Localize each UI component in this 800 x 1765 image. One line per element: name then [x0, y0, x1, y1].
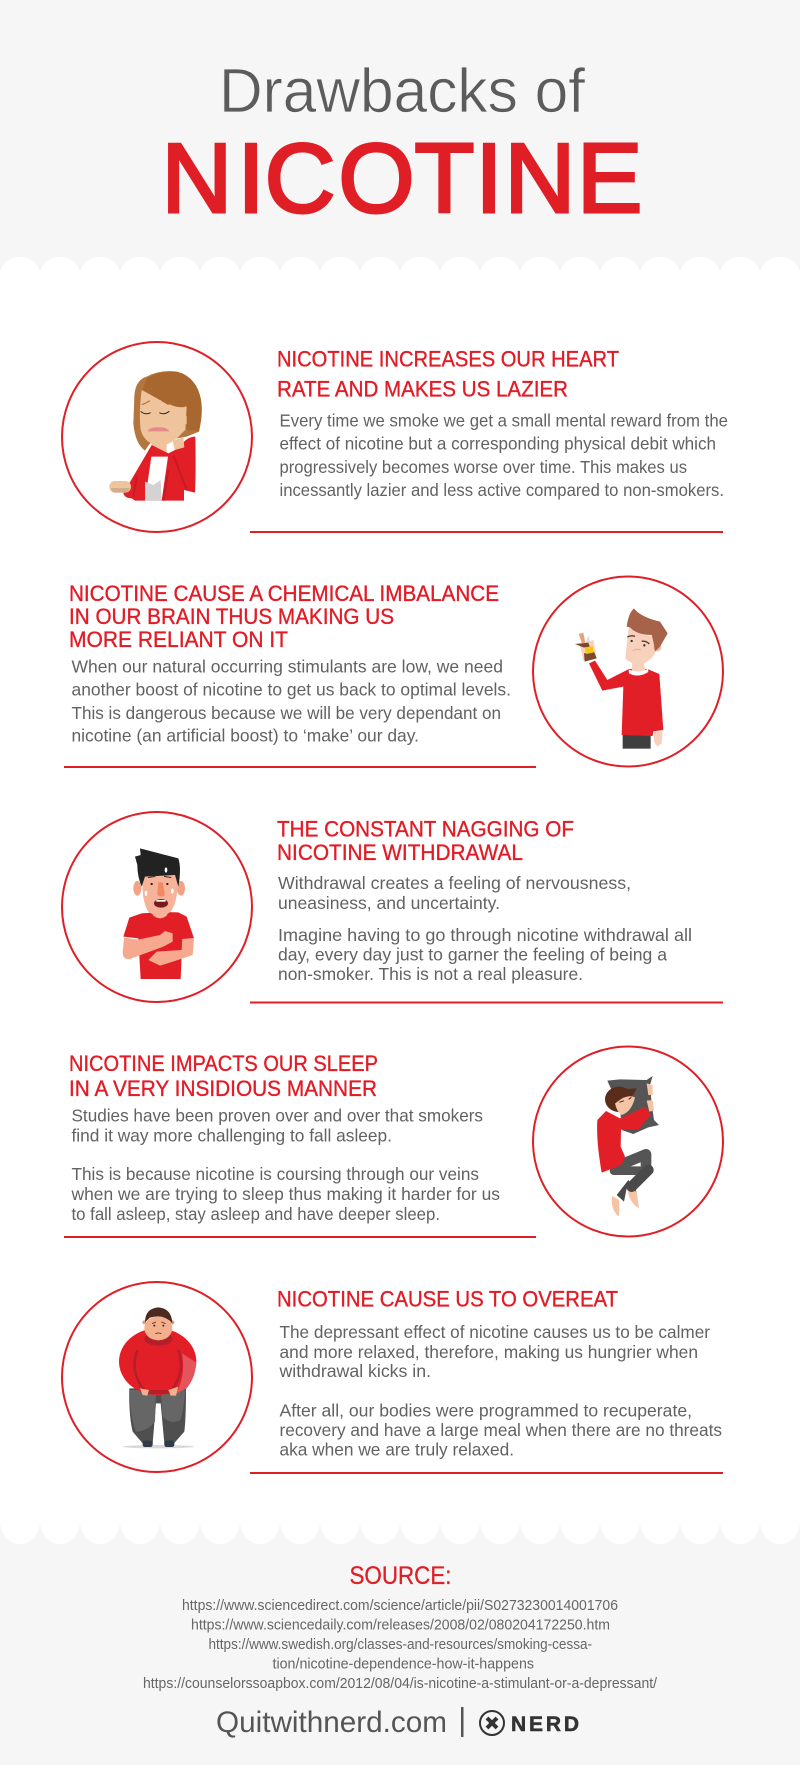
- icon: tired woman holding her neck: [62, 342, 252, 532]
- panel: heart rate and laziness: [62, 342, 728, 533]
- body text: nicotine (an artificial boost) to ‘make’ our day.: [72, 726, 419, 746]
- source heading: SOURCE:: [350, 1562, 452, 1590]
- heading: IN OUR BRAIN THUS MAKING US: [69, 604, 394, 629]
- title line: Drawbacks of: Drawbacks of: [219, 57, 586, 126]
- body text: [72, 657, 511, 746]
- body text: incessantly lazier and less active compared to non-smokers.: [280, 480, 724, 500]
- heading: NICOTINE INCREASES OUR HEART: [277, 347, 619, 372]
- body text: [71, 1106, 500, 1224]
- icon: man curled up hugging a pillow: [533, 1046, 723, 1236]
- body text: find it way more challenging to fall asleep.: [72, 1126, 392, 1146]
- heading: [277, 347, 619, 402]
- heading: NICOTINE IMPACTS OUR SLEEP: [69, 1051, 378, 1076]
- body text: another boost of nicotine to get us back to optimal levels.: [72, 680, 511, 700]
- source urls: tion/nicotine-dependence-how-it-happens: [272, 1656, 534, 1672]
- body text: effect of nicotine but a corresponding physical debit which: [280, 434, 716, 454]
- title: [162, 57, 642, 233]
- icon: man looking at a cigarette pack: [533, 576, 723, 766]
- body text: [278, 1322, 722, 1460]
- body text: non-smoker. This is not a real pleasure.: [278, 964, 583, 984]
- footer branding: [216, 1706, 579, 1739]
- body text: uneasiness, and uncertainty.: [278, 893, 500, 913]
- body text: aka when we are truly relaxed.: [280, 1440, 514, 1460]
- body text: recovery and have a large meal when there are no threats: [280, 1420, 722, 1440]
- source urls: https://www.swedish.org/classes-and-resources/smoking-cessa-: [208, 1637, 592, 1653]
- panel: sleep: [64, 1046, 723, 1238]
- heading: [69, 1051, 378, 1101]
- heading: [277, 817, 574, 865]
- body text: to fall asleep, stay asleep and have deeper sleep.: [72, 1204, 440, 1224]
- heading: IN A VERY INSIDIOUS MANNER: [69, 1076, 377, 1101]
- panel: chemical imbalance: [64, 576, 723, 768]
- body text: Withdrawal creates a feeling of nervousness,: [278, 873, 631, 893]
- body text: After all, our bodies were programmed to recuperate,: [280, 1401, 692, 1421]
- source urls: https://www.sciencedaily.com/releases/2008/02/080204172250.htm: [191, 1618, 610, 1634]
- heading: MORE RELIANT ON IT: [69, 627, 288, 652]
- source urls: https://counselorssoapbox.com/2012/08/04/is-nicotine-a-stimulant-or-a-depressant/: [143, 1676, 658, 1692]
- body text: When our natural occurring stimulants are low, we need: [72, 657, 503, 677]
- body text: [280, 411, 728, 500]
- icon: overweight man in a red sweater: [62, 1282, 252, 1472]
- body text: progressively becomes worse over time. This makes us: [280, 457, 687, 477]
- body text: when we are trying to sleep thus making it harder for us: [71, 1184, 500, 1204]
- body text: Imagine having to go through nicotine withdrawal all: [278, 925, 692, 945]
- source list: [143, 1562, 658, 1692]
- body text: The depressant effect of nicotine causes us to be calmer: [280, 1322, 710, 1342]
- panel: overeating: [62, 1282, 723, 1474]
- icon: NERD logo mark: [480, 1711, 504, 1735]
- logo wordmark: NERD: [511, 1713, 579, 1736]
- body text: and more relaxed, therefore, making us hungrier when: [280, 1342, 698, 1362]
- body text: withdrawal kicks in.: [278, 1361, 431, 1381]
- website name: Quitwithnerd.com: [216, 1706, 447, 1739]
- source urls: [143, 1598, 658, 1692]
- body text: [278, 873, 692, 984]
- heading: NICOTINE CAUSE US TO OVEREAT: [277, 1287, 618, 1312]
- body text: Every time we smoke we get a small mental reward from the: [280, 411, 728, 431]
- heading: THE CONSTANT NAGGING OF: [277, 817, 574, 842]
- body text: This is dangerous because we will be very dependant on: [72, 703, 501, 723]
- panel: nicotine withdrawal: [62, 812, 723, 1004]
- body text: This is because nicotine is coursing through our veins: [72, 1164, 479, 1184]
- heading: NICOTINE CAUSE A CHEMICAL IMBALANCE: [69, 581, 499, 606]
- body text: Studies have been proven over and over that smokers: [72, 1106, 483, 1126]
- heading: NICOTINE WITHDRAWAL: [277, 840, 523, 865]
- title line: NICOTINE: NICOTINE: [162, 123, 642, 233]
- source urls: https://www.sciencedirect.com/science/article/pii/S0273230014001706: [182, 1598, 618, 1614]
- heading: [69, 581, 499, 652]
- icon: sweating man clutching his chest: [62, 812, 252, 1002]
- body text: day, every day just to garner the feeling of being a: [278, 945, 667, 965]
- heading: RATE AND MAKES US LAZIER: [277, 377, 568, 402]
